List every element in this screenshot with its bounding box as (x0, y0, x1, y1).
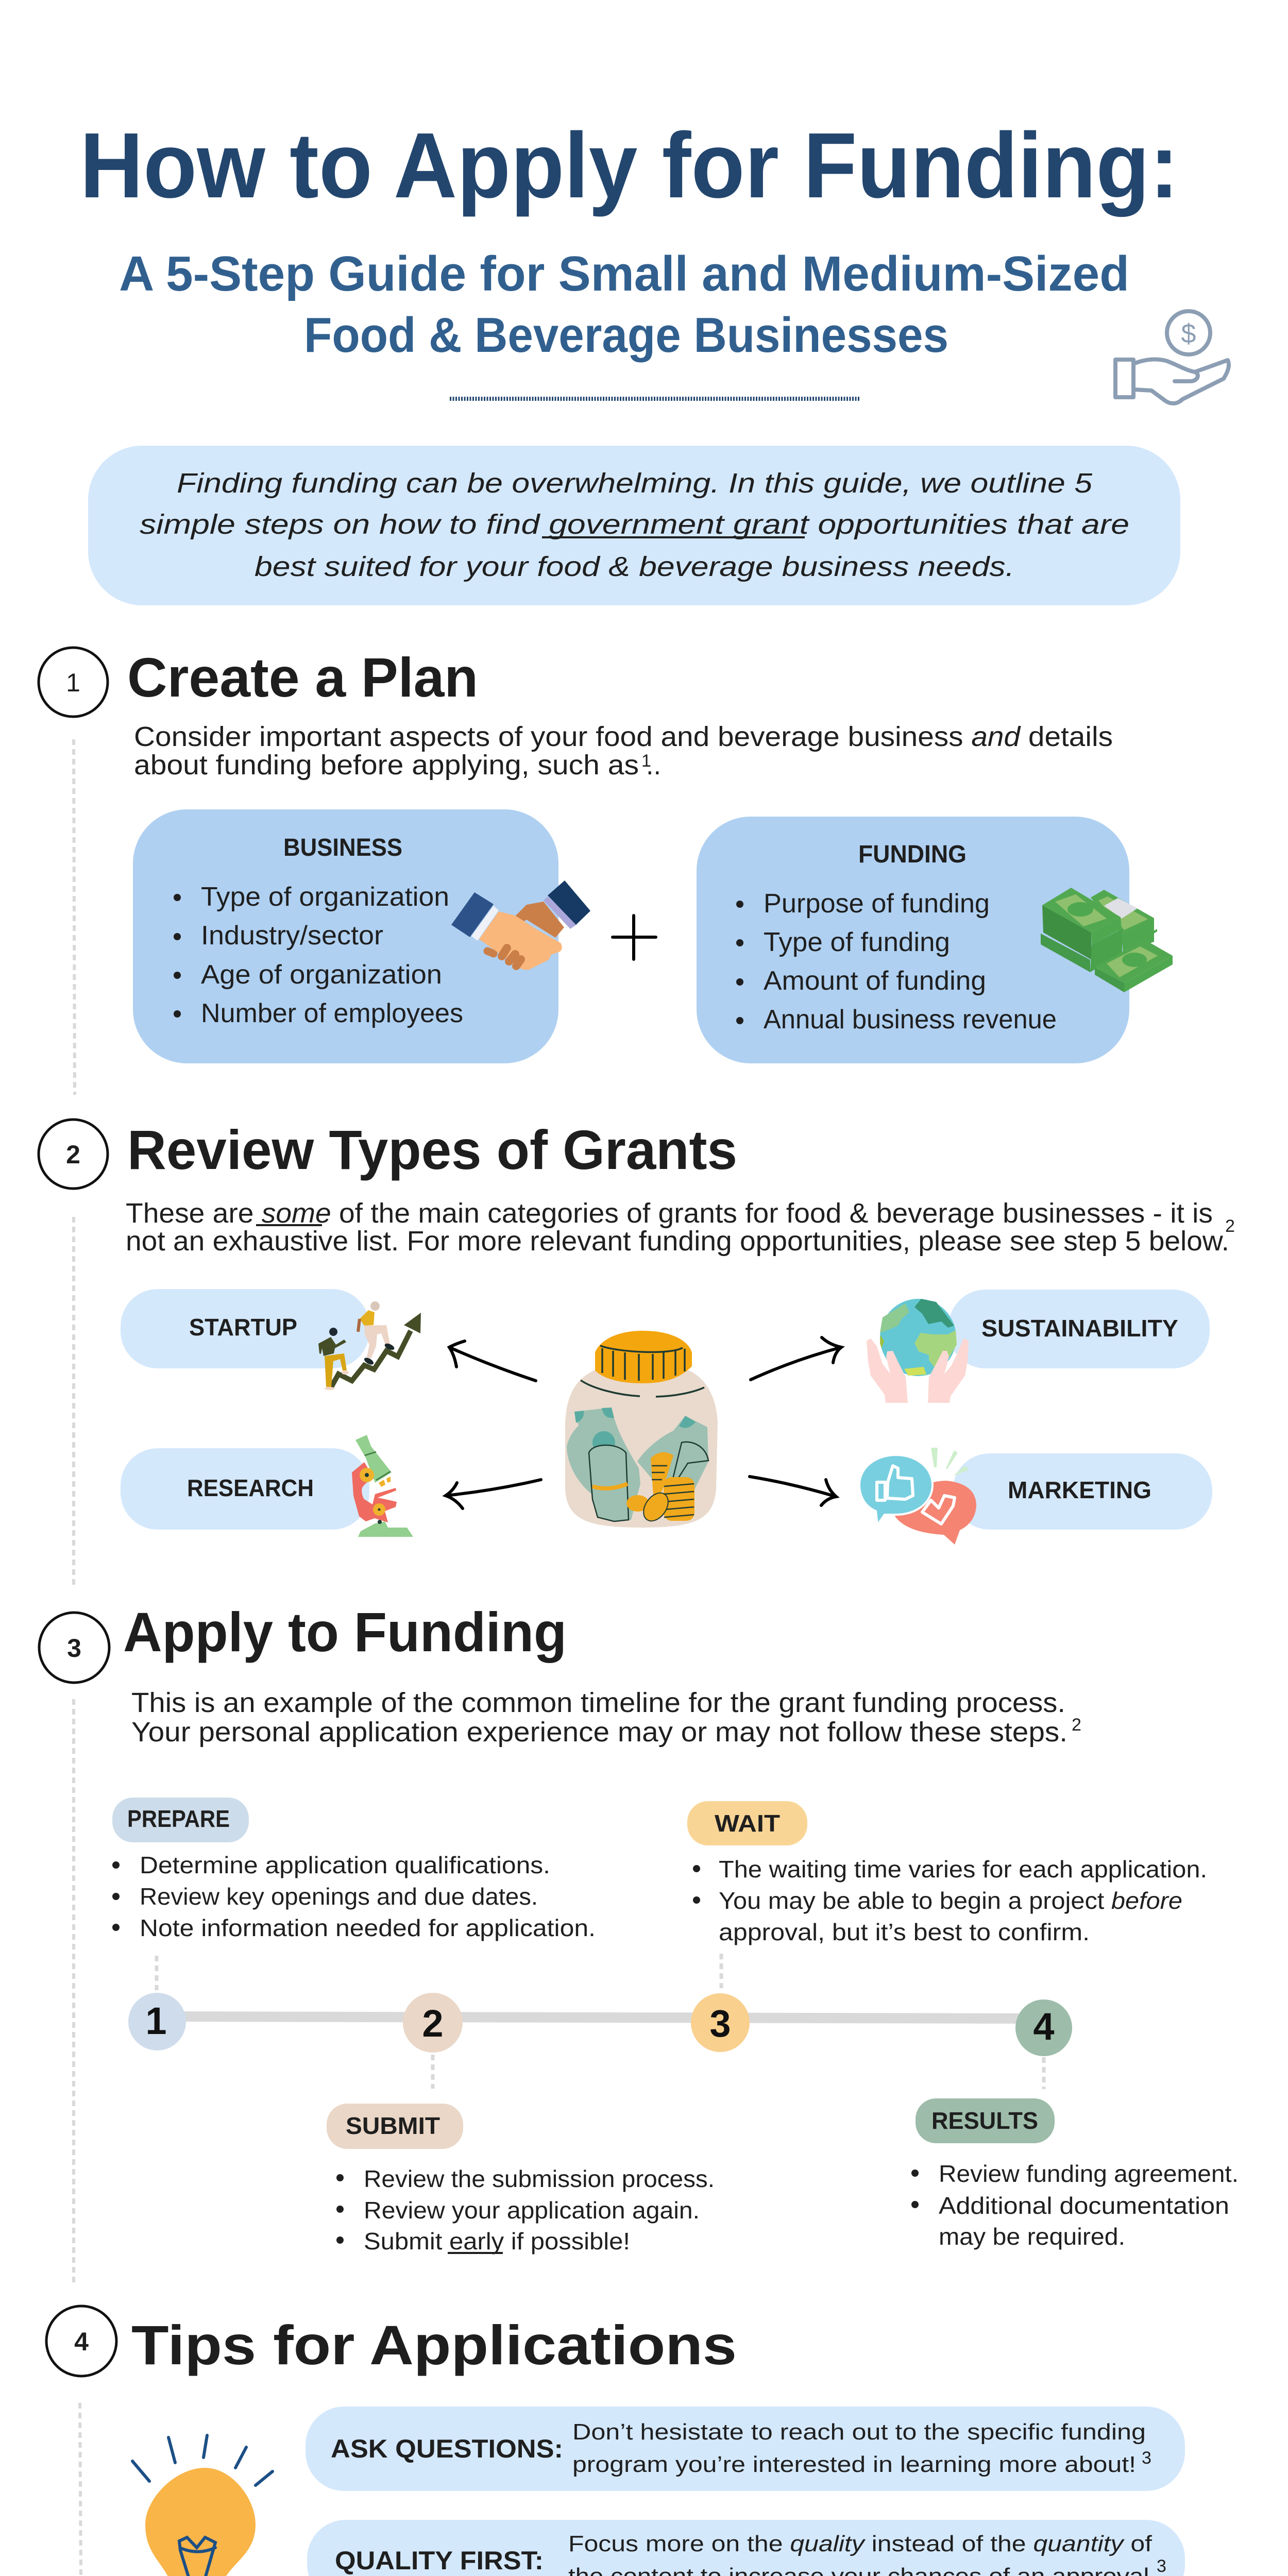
arrow: to sustainability (751, 1337, 841, 1380)
step 3 text: Your personal application experience may or may not follow these steps. (131, 1717, 1067, 1748)
icon: stack of money (1041, 888, 1173, 992)
submit label and list: Review your application again. (364, 2197, 700, 2224)
panel: business (133, 809, 558, 1063)
step 1 text: about funding before applying, such as (134, 750, 639, 781)
tip: quality first: QUALITY FIRST: (335, 2546, 544, 2575)
tip: ask questions (306, 2406, 1185, 2491)
panel: funding: Purpose of funding (764, 889, 990, 919)
step 2 text (126, 1198, 1235, 1257)
tip: ask questions: ASK QUESTIONS: (331, 2434, 563, 2463)
panel: funding: Amount of funding (764, 966, 986, 996)
intro callout (88, 446, 1180, 605)
step 4 number: 4 (74, 2327, 89, 2356)
subtitle (119, 246, 1129, 363)
pill: research (121, 1448, 369, 1530)
step 2 text: These are some of the main categories of grants for food & beverage businesses - it is (126, 1198, 1213, 1229)
icon: money jar (565, 1331, 718, 1528)
icon: microscope (352, 1435, 413, 1537)
submit label and list: Submit early if possible! (364, 2228, 630, 2255)
milestone 4 (1015, 1999, 1072, 2056)
step 1 text: Consider important aspects of your food and beverage business and details (134, 721, 1113, 752)
panel: funding (697, 817, 1129, 1063)
tip: ask questions: program you’re interested in learning more about! (572, 2452, 1136, 2477)
milestone 2 (403, 1993, 463, 2053)
pill: startup: STARTUP (189, 1314, 297, 1341)
icon: hands holding globe (867, 1299, 969, 1403)
milestone 1 (128, 1993, 186, 2050)
plus sign (613, 916, 656, 959)
results label and list: Review funding agreement. (939, 2160, 1239, 2187)
wait label and list: approval, but it’s best to confirm. (719, 1919, 1090, 1945)
pill: marketing: MARKETING (1008, 1477, 1151, 1503)
step 1 number (39, 648, 108, 717)
arrow: to research (446, 1480, 541, 1509)
step 3 number: 3 (67, 1634, 81, 1663)
intro callout: best suited for your food & beverage business needs. (255, 551, 1014, 582)
pill: marketing (953, 1453, 1212, 1530)
step 1 text (134, 721, 1113, 781)
tip: quality first: Focus more on the quality instead of the quantity of (568, 2531, 1153, 2556)
panel: business: Type of organization (201, 882, 449, 912)
step 1 heading: Create a Plan (127, 646, 478, 708)
step 4: tips for applications (46, 2306, 1185, 2576)
results label and list: Additional documentation (939, 2192, 1229, 2219)
tip: ask questions: 3 (1142, 2448, 1151, 2468)
results label and list (911, 2098, 1239, 2250)
timeline bar (156, 2011, 1043, 2024)
tip: quality first (307, 2520, 1185, 2576)
subtitle: Food & Beverage Businesses (304, 308, 948, 363)
wait label and list: WAIT (715, 1810, 780, 1837)
pill: sustainability: SUSTAINABILITY (981, 1315, 1178, 1342)
step 2: review types of grants (39, 1118, 1235, 1588)
step 1 number: 1 (66, 668, 80, 697)
wait label and list: You may be able to begin a project before (719, 1887, 1182, 1914)
step 3 text (131, 1687, 1081, 1748)
panel: funding: Annual business revenue (764, 1005, 1057, 1035)
subtitle: A 5-Step Guide for Small and Medium-Sized (119, 246, 1129, 301)
prepare label and list: Review key openings and due dates. (140, 1883, 538, 1910)
arrow: to marketing (750, 1477, 836, 1505)
intro callout: Finding funding can be overwhelming. In this guide, we outline 5 (177, 468, 1093, 499)
milestone 4: 4 (1033, 2005, 1055, 2048)
icon: light bulb (132, 2435, 273, 2576)
icon: social bubbles (859, 1448, 976, 1545)
title: How to Apply for Funding: (80, 114, 1179, 217)
results label and list: may be required. (939, 2223, 1125, 2250)
step 3 number (39, 1613, 109, 1683)
submit label and list (327, 2104, 715, 2255)
prepare label and list: PREPARE (127, 1805, 230, 1832)
step 3 heading: Apply to Funding (123, 1601, 567, 1663)
step 2 number (39, 1120, 108, 1189)
step 4 heading: Tips for Applications (131, 2314, 737, 2376)
step 2 number: 2 (66, 1140, 80, 1169)
step 1 text: 1 (641, 751, 651, 771)
submit label and list: Review the submission process. (364, 2165, 715, 2192)
prepare label and list (112, 1798, 596, 1941)
step 2 text: not an exhaustive list. For more relevant funding opportunities, please see step 5 below. (126, 1226, 1229, 1257)
arrow: to startup (449, 1341, 536, 1381)
step 2 heading: Review Types of Grants (127, 1118, 737, 1181)
pill: startup (121, 1289, 369, 1368)
panel: business: Age of organization (201, 960, 442, 990)
step 3: apply to funding (39, 1601, 1239, 2282)
icon: hand holding coin (1115, 311, 1229, 403)
panel: business: Industry/sector (201, 921, 383, 951)
panel: funding: Type of funding (764, 927, 950, 957)
panel: funding: FUNDING (858, 841, 967, 868)
prepare label and list: Determine application qualifications. (140, 1852, 550, 1878)
wait label and list (687, 1801, 1207, 1945)
icon: handshake (451, 880, 590, 970)
icon: hand holding coin: $ (1181, 319, 1196, 349)
step 2 text: 2 (1225, 1216, 1235, 1236)
pill: research: RESEARCH (187, 1475, 314, 1501)
milestone 1: 1 (145, 1999, 167, 2042)
icon: people climbing arrow (318, 1301, 421, 1390)
step 3 text: This is an example of the common timeline for the grant funding process. (131, 1687, 1065, 1718)
panel: business: Number of employees (201, 998, 463, 1028)
panel: business: BUSINESS (283, 834, 402, 861)
step 1: create a plan (39, 646, 1173, 1095)
step 4 number (46, 2306, 116, 2376)
wait label and list: The waiting time varies for each application. (719, 1856, 1207, 1883)
connectors (157, 1954, 1044, 2089)
milestone 3 (691, 1993, 750, 2052)
intro callout: simple steps on how to find government grant opportunities that are (140, 509, 1129, 540)
submit label and list: SUBMIT (346, 2112, 440, 2139)
pill: sustainability (948, 1290, 1210, 1368)
milestone 3: 3 (709, 2002, 731, 2045)
tip: ask questions: Don’t hesistate to reach out to the specific funding (572, 2419, 1146, 2445)
step 1 text: .. (646, 750, 661, 781)
prepare label and list: Note information needed for application. (140, 1914, 596, 1941)
results label and list: RESULTS (931, 2107, 1038, 2134)
step 3 text: 2 (1072, 1715, 1081, 1735)
tip: quality first: 3 (1157, 2556, 1166, 2576)
milestone 2: 2 (422, 2002, 444, 2045)
